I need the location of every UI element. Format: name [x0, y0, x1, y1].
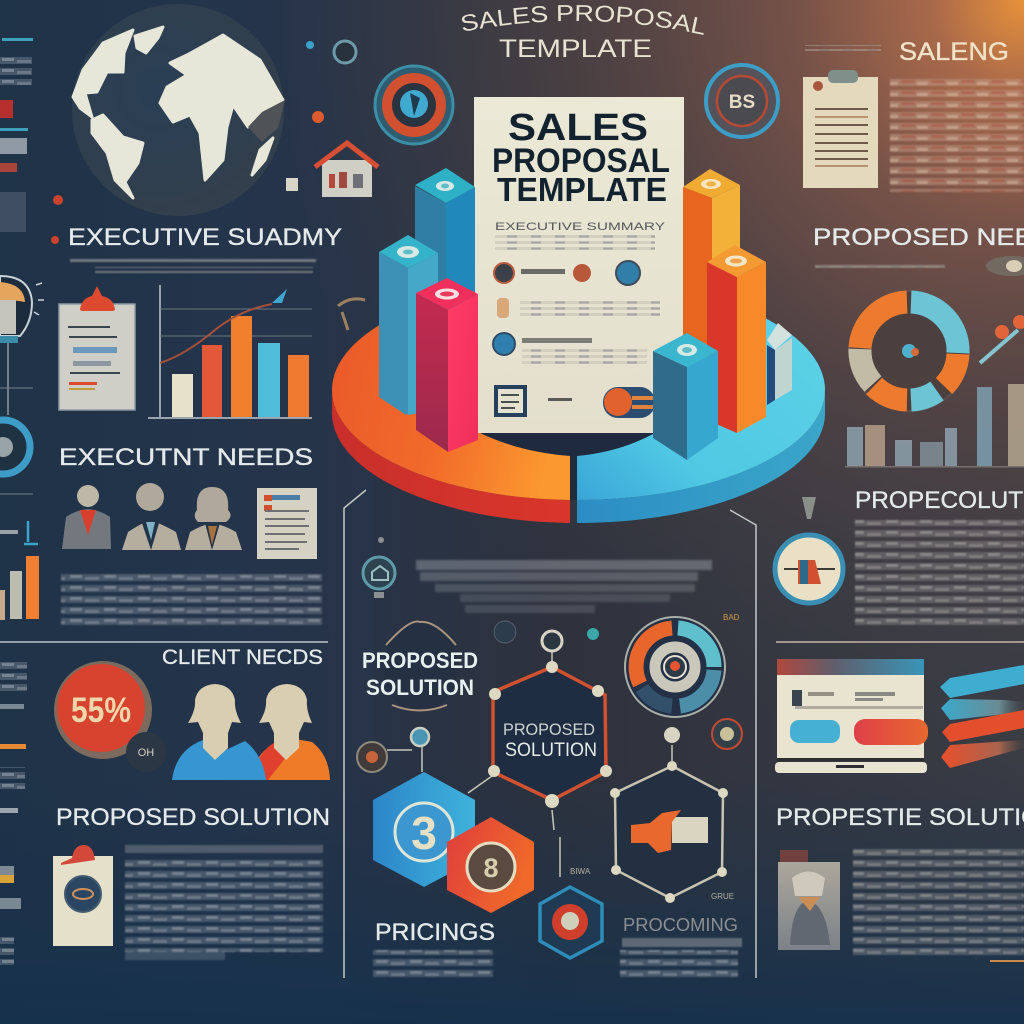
small scattered icons near globe — [51, 41, 356, 244]
text block right middle — [855, 520, 1024, 625]
clipboard — [59, 286, 135, 410]
left edge strips lower — [0, 662, 27, 965]
BS badge icon — [706, 65, 778, 137]
hexagon: orange — [447, 817, 534, 913]
small labels by hexagons — [570, 613, 740, 901]
heading: pricings: PRICINGS — [375, 919, 495, 946]
3D bar blue back-left — [415, 168, 475, 345]
hexagon: blue: 3 — [411, 807, 437, 859]
text block left middle — [61, 571, 322, 626]
people icons — [62, 483, 242, 550]
heading: executive summary: EXECUTIVE SUADMY — [68, 224, 342, 251]
small text below pricings — [373, 950, 493, 978]
hexagon: proposed solution: SOLUTION — [505, 740, 597, 761]
client figures — [172, 684, 330, 780]
hexagon: proposed solution: PROPOSED — [503, 720, 595, 739]
hexagon: proposed solution — [488, 661, 612, 808]
top title: TEMPLATE — [499, 35, 652, 63]
small text — [70, 258, 316, 273]
heading: proposed solution centre: SOLUTION — [366, 675, 474, 700]
donut chart — [849, 291, 969, 411]
small tool icon right — [802, 497, 816, 519]
heading: proposed solution centre — [362, 648, 478, 700]
3D bar orange right — [707, 245, 766, 433]
document icon row — [494, 261, 640, 285]
3D bar blue left — [379, 235, 438, 415]
hexagon: orange: 8 — [483, 853, 499, 883]
small labels by hexagons: GRUE — [711, 892, 734, 901]
target badge icon — [375, 66, 453, 144]
lightbulb icon — [0, 276, 44, 415]
heading: propestie solution: PROPESTIE SOLUTIO — [776, 804, 1024, 831]
document text lines — [495, 235, 655, 253]
top title: SALES PROPOSAL — [462, 5, 704, 35]
text block bottom right — [853, 845, 1024, 957]
heading: propecolution: PROPECOLUTI — [855, 487, 1024, 514]
hexagon: blue — [373, 772, 475, 887]
small labels by hexagons: BAD — [723, 613, 740, 622]
document list item two — [493, 333, 647, 367]
heading: proposed solution left: PROPOSED SOLUTION — [56, 804, 330, 831]
central bracket panel — [344, 490, 756, 978]
heading: processing: PROCOMING — [623, 915, 738, 935]
ribbons right — [940, 665, 1024, 768]
BS badge icon: BS — [729, 92, 755, 113]
small text below processing — [620, 938, 742, 978]
bar chart — [148, 285, 312, 418]
document title: PROPOSAL — [492, 142, 670, 180]
top title — [462, 5, 704, 63]
central platform — [332, 280, 825, 523]
small labels by hexagons: BIWA — [570, 867, 591, 876]
portrait card — [778, 850, 840, 950]
heading: proposed needs: PROPOSED NEE — [813, 224, 1024, 251]
text block top right — [890, 77, 1024, 192]
55% badge: 55% — [71, 691, 131, 730]
small caption top right — [805, 45, 881, 51]
clock badge icon — [775, 535, 843, 603]
heading: saleng: SALENG — [899, 38, 1009, 66]
divider left — [0, 641, 328, 643]
bag card icon — [53, 845, 113, 946]
left ring icon — [0, 420, 33, 494]
document subheading: EXECUTIVE SUMMARY — [495, 221, 666, 233]
globe icon — [72, 4, 285, 216]
target dial — [625, 617, 725, 717]
heading: proposed solution centre: PROPOSED — [362, 648, 478, 673]
document list item one — [497, 298, 660, 318]
proposal document — [474, 97, 684, 433]
hexagon: outline with hand — [610, 761, 728, 903]
mini bar chart — [0, 521, 39, 620]
small node icons — [357, 621, 742, 772]
3D bar blue front — [653, 333, 718, 460]
pointer pin right — [980, 315, 1024, 363]
text block bottom left — [125, 845, 323, 960]
55% badge — [54, 661, 166, 772]
dome disc behind heading — [383, 621, 457, 712]
house icon — [315, 143, 378, 197]
document title: TEMPLATE — [497, 171, 667, 208]
document title — [492, 107, 670, 208]
bottom hexagon icon — [540, 887, 602, 958]
small bars right — [845, 384, 1024, 468]
browser window panel — [775, 659, 928, 773]
heading: executunt needs: EXECUTNT NEEDS — [59, 444, 313, 471]
small tool icon beside chart — [338, 299, 365, 330]
node network lines — [387, 652, 672, 877]
3D bar orange back-right — [683, 169, 740, 360]
orange rule bottom right — [990, 960, 1024, 962]
3D bar small grey-blue — [767, 323, 792, 405]
watch icon — [363, 537, 395, 598]
3D bar red — [416, 278, 478, 452]
document footer icons — [494, 385, 655, 418]
document title: SALES — [508, 107, 648, 149]
divider right — [776, 641, 1024, 643]
heading: client needs: CLIENT NECDS — [162, 646, 323, 669]
clipboard top right — [803, 70, 878, 188]
small text right — [815, 256, 1024, 276]
55% badge: OH — [138, 747, 154, 759]
left panel: executive summary — [59, 224, 342, 418]
central text block — [416, 560, 712, 613]
left edge icons — [0, 38, 33, 232]
document card — [257, 488, 317, 559]
